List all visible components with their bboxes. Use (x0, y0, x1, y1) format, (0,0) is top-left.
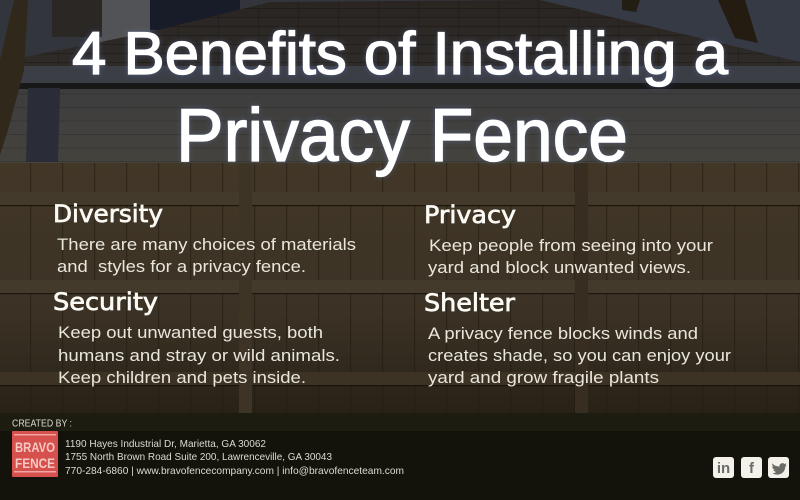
text: shelter body: A privacy fence blocks winds and (428, 324, 698, 343)
text: diversity body: There are many choices of materials (57, 235, 356, 254)
tree trunk (0, 0, 28, 155)
text: security body: Keep out unwanted guests, both (58, 323, 323, 342)
text: diversity body: and styles for a privacy fence. (57, 257, 306, 276)
icon: linkedin (713, 457, 734, 478)
heading: shelter: Shelter (424, 289, 515, 317)
text: shelter body: yard and grow fragile plants (428, 368, 659, 387)
panel: security (53, 288, 340, 387)
title (72, 20, 729, 177)
logo: Bravo Fence (12, 431, 58, 477)
logo: Bravo Fence: FENCE (15, 455, 55, 471)
posts (239, 163, 252, 415)
text: security body: humans and stray or wild animals. (58, 346, 340, 365)
fence (0, 163, 800, 415)
text: privacy body: yard and block unwanted views. (428, 258, 691, 277)
panel: diversity (53, 200, 356, 276)
heading: privacy: Privacy (424, 201, 516, 229)
footer: contact details: 770-284-6860 | www.bravofencecompany.com | info@bravofenceteam.com (65, 465, 404, 477)
panel: shelter (424, 289, 731, 387)
icon: linkedin: in (717, 460, 730, 477)
icon: facebook: f (749, 460, 755, 477)
title line 1: 4 Benefits of Installing a (72, 20, 729, 87)
footer: contact details: 1190 Hayes Industrial Dr, Marietta, GA 30062 (65, 438, 266, 450)
text: shelter body: creates shade, so you can enjoy your (428, 346, 731, 365)
logo: Bravo Fence: BRAVO (15, 439, 55, 455)
shadow on wall (26, 88, 60, 162)
footer: created by label: CREATED BY : (12, 418, 72, 430)
footer: contact details: 1755 North Brown Road Suite 200, Lawrenceville, GA 30043 (65, 451, 332, 463)
text: privacy body: Keep people from seeing into your (429, 236, 713, 255)
heading: diversity: Diversity (53, 200, 163, 228)
rails (0, 192, 800, 205)
heading: security: Security (53, 288, 158, 316)
sky and wall upper area (0, 0, 800, 90)
icon: facebook (741, 457, 762, 478)
text: security body: Keep children and pets inside. (58, 368, 306, 387)
panel: privacy (424, 201, 713, 277)
icon: twitter (768, 457, 789, 478)
lawn (0, 413, 800, 500)
siding (0, 89, 800, 165)
fascia (0, 66, 800, 84)
title line 2: Privacy Fence (176, 93, 628, 177)
roof (0, 0, 800, 86)
